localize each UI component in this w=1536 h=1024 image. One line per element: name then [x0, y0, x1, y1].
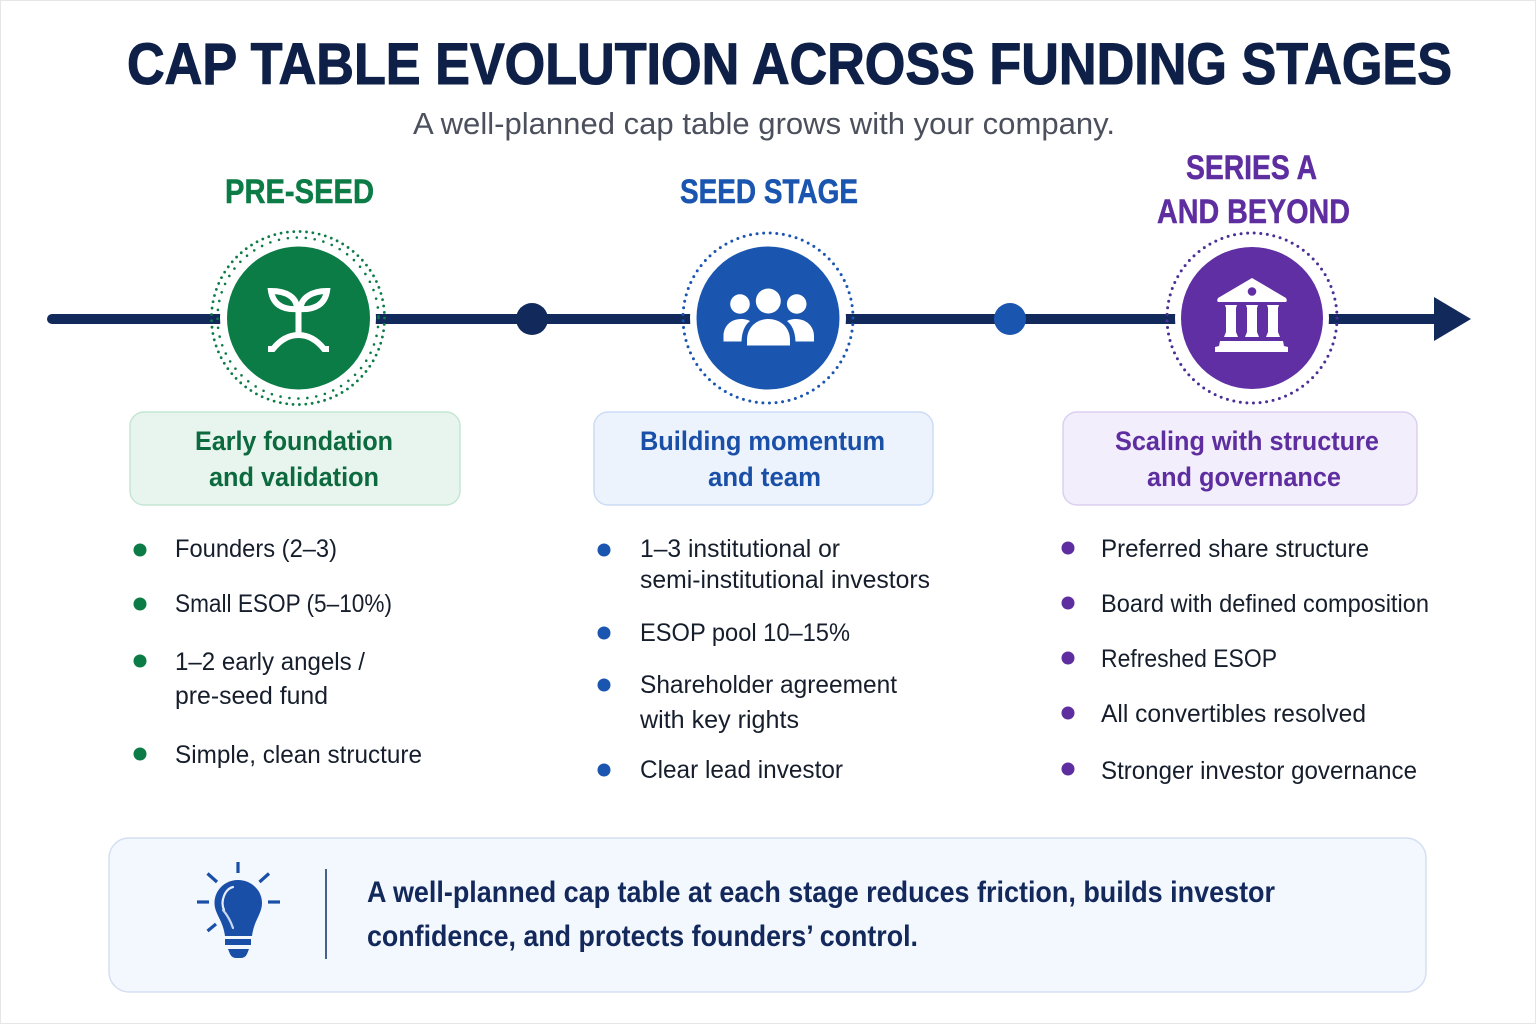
callout: early foundation: Early foundation	[195, 426, 393, 456]
callout: early foundation	[130, 412, 460, 505]
list: series a items: All convertibles resolved	[1101, 700, 1366, 728]
list: seed items	[598, 535, 930, 784]
list: seed items: with key rights	[639, 706, 799, 734]
heading: series a and beyond: SERIES A	[1186, 149, 1317, 187]
list: pre-seed items: Small ESOP (5–10%)	[175, 590, 392, 618]
panel: series a and beyond	[1062, 149, 1429, 785]
panel: seed stage	[594, 173, 933, 784]
list: pre-seed items: Founders (2–3)	[175, 535, 337, 563]
callout: scaling with structure: and governance	[1147, 462, 1341, 492]
callout: scaling with structure: Scaling with structure	[1115, 426, 1379, 456]
list: series a items	[1062, 535, 1429, 785]
list: series a items: Board with defined composition	[1101, 590, 1429, 618]
list: series a items: Preferred share structure	[1101, 535, 1369, 563]
list: pre-seed items	[134, 535, 422, 769]
list: seed items: ESOP pool 10–15%	[640, 619, 850, 647]
icon: light bulb	[197, 862, 280, 958]
text: takeaway: confidence, and protects founders’ control.	[367, 920, 918, 953]
list: pre-seed items: pre-seed fund	[175, 682, 328, 710]
text: takeaway: A well-planned cap table at each stage reduces friction, builds investor	[367, 876, 1275, 909]
heading: series a and beyond	[1157, 149, 1350, 231]
list: seed items: 1–3 institutional or	[640, 535, 840, 563]
text: takeaway	[367, 876, 1275, 953]
icon: people in blue circle	[683, 233, 853, 403]
callout: scaling with structure	[1063, 412, 1417, 505]
icon: sprout in green circle	[212, 232, 384, 404]
list: series a items: Refreshed ESOP	[1101, 645, 1277, 673]
list: seed items: Shareholder agreement	[640, 671, 897, 699]
subtitle: A well-planned cap table grows with your company.	[413, 106, 1115, 141]
heading: pre-seed: PRE-SEED	[225, 173, 374, 211]
heading: series a and beyond: AND BEYOND	[1157, 193, 1350, 231]
list: series a items: Stronger investor governance	[1101, 757, 1417, 785]
panel: pre-seed	[130, 173, 460, 769]
list: pre-seed items: Simple, clean structure	[175, 741, 422, 769]
list: seed items: semi-institutional investors	[640, 566, 930, 594]
callout: building momentum: Building momentum	[640, 426, 885, 456]
list: seed items: Clear lead investor	[640, 756, 843, 784]
callout: early foundation: and validation	[209, 462, 379, 492]
callout: building momentum: and team	[708, 462, 821, 492]
callout: building momentum	[594, 412, 933, 505]
timeline arrow	[52, 297, 1471, 341]
heading: seed stage: SEED STAGE	[680, 173, 858, 211]
list: pre-seed items: 1–2 early angels /	[175, 648, 365, 676]
panel: key takeaway	[109, 838, 1426, 992]
icon: institution in purple circle	[1167, 233, 1337, 403]
